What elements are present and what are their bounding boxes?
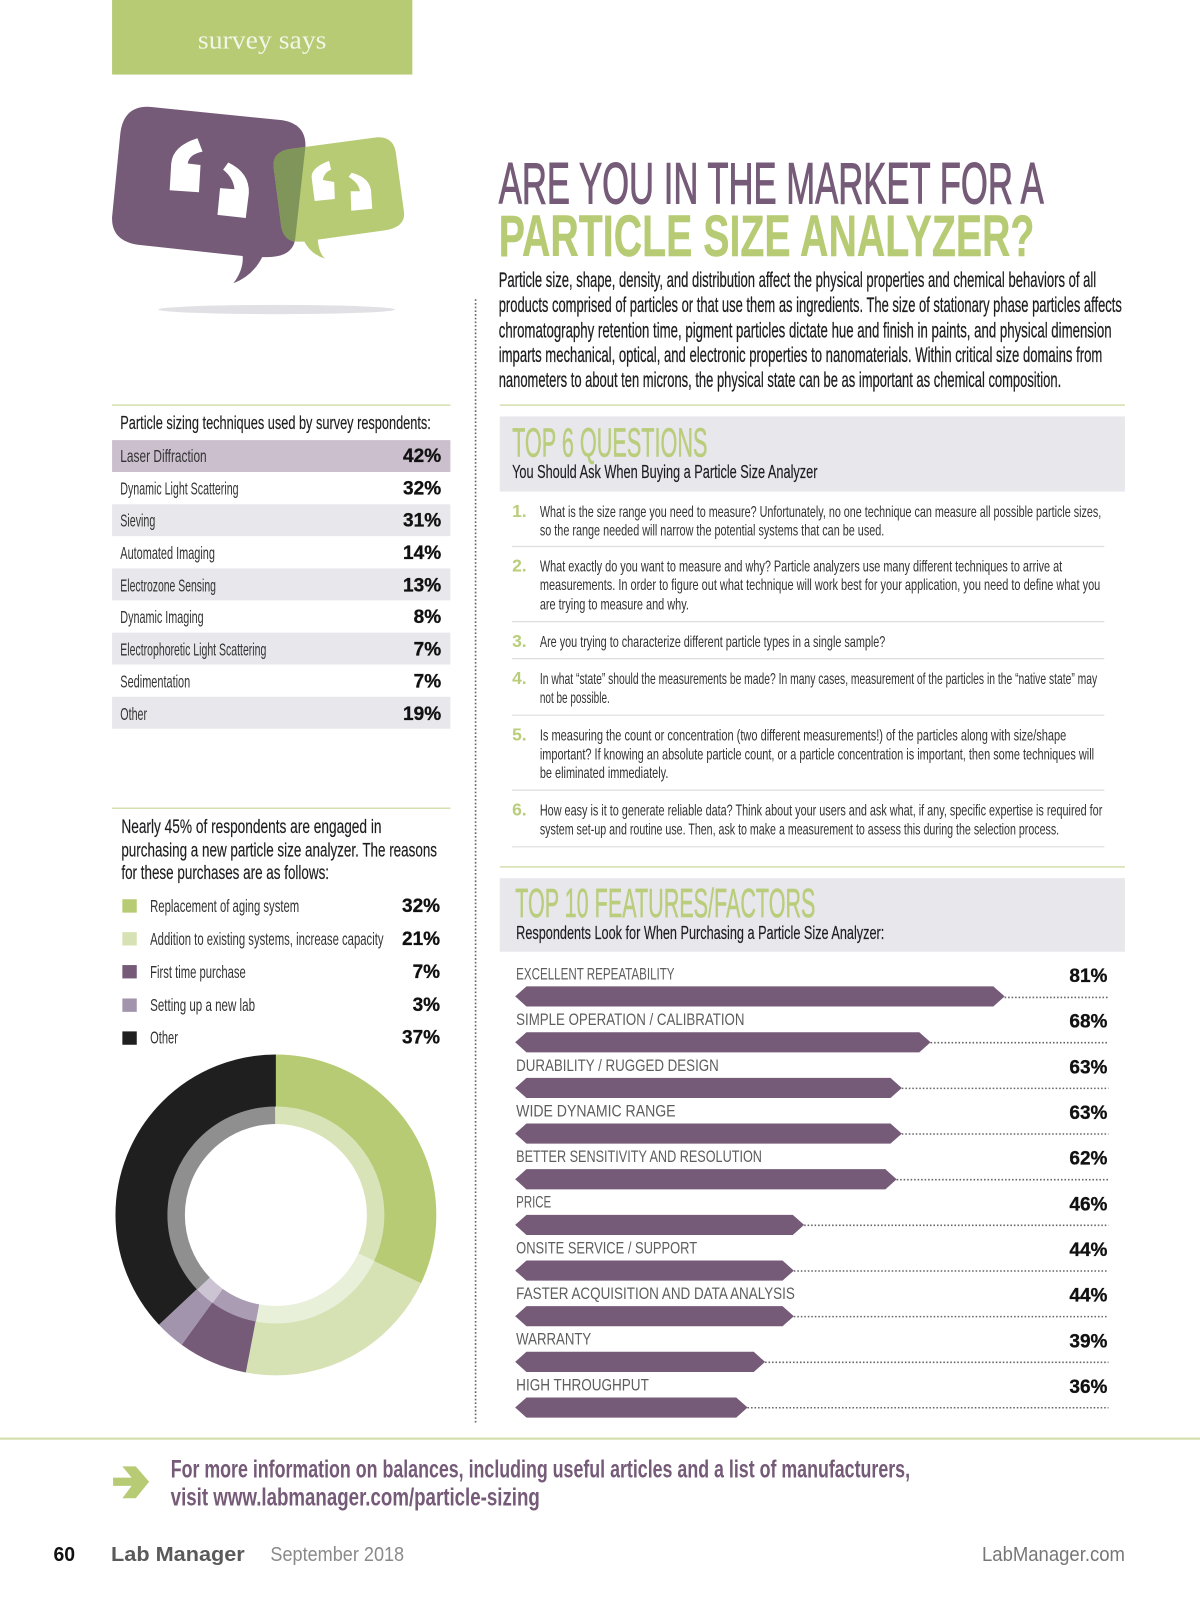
legend: purchase reasons: Setting up a new lab	[150, 995, 255, 1015]
panel: particle sizing techniques table: 8%	[414, 607, 441, 628]
question 4: not be possible.	[540, 690, 610, 707]
bar: excellent repeatability: EXCELLENT REPEATABILITY	[516, 965, 675, 983]
panel: top 6 questions header	[500, 416, 1125, 492]
divider: vertical dotted line	[475, 299, 477, 1424]
section banner: survey says: survey says	[198, 24, 326, 54]
bar: warranty: 39%	[1069, 1331, 1108, 1352]
panel: top 10 features header: TOP 10 FEATURES/FACTORS	[515, 880, 815, 926]
section banner: survey says	[112, 0, 412, 75]
bar: high throughput: 36%	[1069, 1377, 1108, 1398]
question 2: 2.	[512, 556, 527, 576]
callout: more information	[171, 1457, 910, 1511]
bar: price	[515, 1194, 1108, 1235]
bar: high throughput	[515, 1376, 1108, 1418]
panel: particle sizing techniques table: Dynamic Imaging	[120, 607, 204, 627]
panel: particle sizing techniques table: Particle sizing techniques used by survey respondents:	[120, 412, 431, 433]
question 6	[512, 799, 1104, 847]
bar: sensitivity	[515, 1148, 1108, 1189]
question 5: be eliminated immediately.	[540, 765, 668, 782]
panel: particle sizing techniques table: Sedimentation	[120, 671, 190, 691]
bar: simple operation: 68%	[1069, 1012, 1108, 1033]
legend: purchase reasons: 37%	[402, 1028, 440, 1049]
panel: particle sizing techniques table: 42%	[403, 446, 441, 467]
panel: top 10 features header: Respondents Look for When Purchasing a Particle Size Analyzer:	[516, 922, 884, 943]
question 1: 1.	[512, 501, 527, 521]
bar: warranty: WARRANTY	[516, 1331, 591, 1349]
bar: price: PRICE	[516, 1194, 551, 1212]
bar: faster acquisition: 44%	[1069, 1286, 1108, 1307]
legend: purchase reasons: 32%	[402, 896, 440, 917]
panel: top 6 questions header: You Should Ask When Buying a Particle Size Analyzer	[512, 461, 817, 482]
bar: onsite service: ONSITE SERVICE / SUPPORT	[516, 1239, 697, 1257]
question 5	[512, 724, 1104, 790]
panel: particle sizing techniques table: 13%	[403, 575, 441, 596]
footer	[53, 1543, 1125, 1566]
callout: more information: For more information on balances, including useful articles and a list of manufacturers,	[171, 1457, 910, 1484]
question 1	[512, 501, 1104, 547]
footer: LabManager.com	[982, 1543, 1125, 1566]
text block: purchase reasons intro: for these purchases are as follows:	[121, 863, 329, 884]
panel: particle sizing techniques table: 7%	[414, 671, 441, 692]
question 6: 6.	[512, 799, 527, 819]
panel: particle sizing techniques table: Sieving	[120, 510, 155, 530]
legend: purchase reasons: Other	[150, 1028, 178, 1048]
question 2	[512, 556, 1104, 622]
bar: excellent repeatability: 81%	[1069, 966, 1108, 987]
bar: simple operation	[515, 1011, 1108, 1052]
panel: particle sizing techniques table: 14%	[403, 543, 441, 564]
bar: simple operation: SIMPLE OPERATION / CALIBRATION	[516, 1011, 744, 1029]
legend: purchase reasons: 7%	[413, 962, 440, 983]
list: top 6 questions	[512, 501, 1104, 847]
question 3	[512, 631, 1104, 659]
bar: durability: DURABILITY / RUGGED DESIGN	[516, 1057, 719, 1075]
bar: excellent repeatability	[515, 965, 1108, 1007]
bar: high throughput: HIGH THROUGHPUT	[516, 1376, 649, 1394]
bar: durability	[515, 1057, 1108, 1098]
panel: particle sizing techniques table: Automated Imaging	[120, 543, 215, 563]
legend: purchase reasons: 3%	[413, 995, 440, 1016]
icon: speech bubbles	[112, 107, 404, 314]
legend: purchase reasons: Addition to existing systems, increase capacity	[150, 929, 384, 949]
chart: donut of purchase reasons	[142, 1081, 410, 1349]
panel: particle sizing techniques table: 31%	[403, 510, 441, 531]
title	[499, 152, 1044, 269]
question 3: Are you trying to characterize different particle types in a single sample?	[540, 634, 885, 651]
panel: top 6 questions header: TOP 6 QUESTIONS	[512, 420, 707, 466]
panel: particle sizing techniques table: Other	[120, 704, 147, 724]
panel: particle sizing techniques table: Laser Diffraction	[120, 446, 207, 466]
text block: purchase reasons intro: purchasing a new particle size analyzer. The reasons	[121, 841, 437, 862]
bar: sensitivity: BETTER SENSITIVITY AND RESOLUTION	[516, 1148, 762, 1166]
text block: purchase reasons intro: Nearly 45% of respondents are engaged in	[121, 817, 381, 838]
bar: faster acquisition	[515, 1285, 1108, 1326]
bar: wide dynamic range	[515, 1102, 1108, 1144]
question 1: so the range needed will narrow the potential systems that can be used.	[540, 523, 884, 540]
panel: particle sizing techniques table: 7%	[414, 640, 441, 661]
footer: 60	[53, 1543, 75, 1566]
callout: more information: visit www.labmanager.com/particle-sizing	[171, 1484, 540, 1511]
question 5: 5.	[512, 724, 527, 744]
panel: particle sizing techniques table: Dynamic Light Scattering	[120, 479, 239, 499]
legend: purchase reasons	[122, 896, 440, 1049]
bar: onsite service: 44%	[1069, 1240, 1108, 1261]
bar chart: top 10 features	[515, 965, 1108, 1418]
legend: purchase reasons: First time purchase	[150, 962, 246, 982]
question 2: are trying to measure and why.	[540, 596, 689, 613]
legend: purchase reasons: 21%	[402, 929, 440, 950]
bar: wide dynamic range: WIDE DYNAMIC RANGE	[516, 1102, 676, 1120]
bar: durability: 63%	[1069, 1057, 1108, 1078]
panel: particle sizing techniques table: Electrophoretic Light Scattering	[120, 640, 266, 660]
intro paragraph	[499, 269, 1122, 392]
footer: Lab Manager	[111, 1543, 245, 1566]
bar: warranty	[515, 1331, 1108, 1372]
legend: purchase reasons: Replacement of aging system	[150, 896, 299, 916]
text block: purchase reasons intro	[121, 817, 437, 884]
panel: particle sizing techniques table: 32%	[403, 479, 441, 500]
panel: particle sizing techniques table: 19%	[403, 704, 441, 725]
bar: wide dynamic range: 63%	[1069, 1103, 1108, 1124]
panel: particle sizing techniques table: Electrozone Sensing	[120, 575, 216, 595]
question 4	[512, 668, 1104, 715]
question 3: 3.	[512, 631, 527, 651]
icon: arrow	[113, 1466, 149, 1498]
bar: sensitivity: 62%	[1069, 1149, 1108, 1170]
panel: top 10 features header	[500, 878, 1125, 952]
panel: particle sizing techniques table	[112, 412, 450, 729]
bar: price: 46%	[1069, 1194, 1108, 1215]
question 4: 4.	[512, 668, 527, 688]
bar: onsite service	[515, 1239, 1108, 1281]
bar: faster acquisition: FASTER ACQUISITION AND DATA ANALYSIS	[516, 1285, 795, 1303]
footer: September 2018	[270, 1543, 404, 1566]
